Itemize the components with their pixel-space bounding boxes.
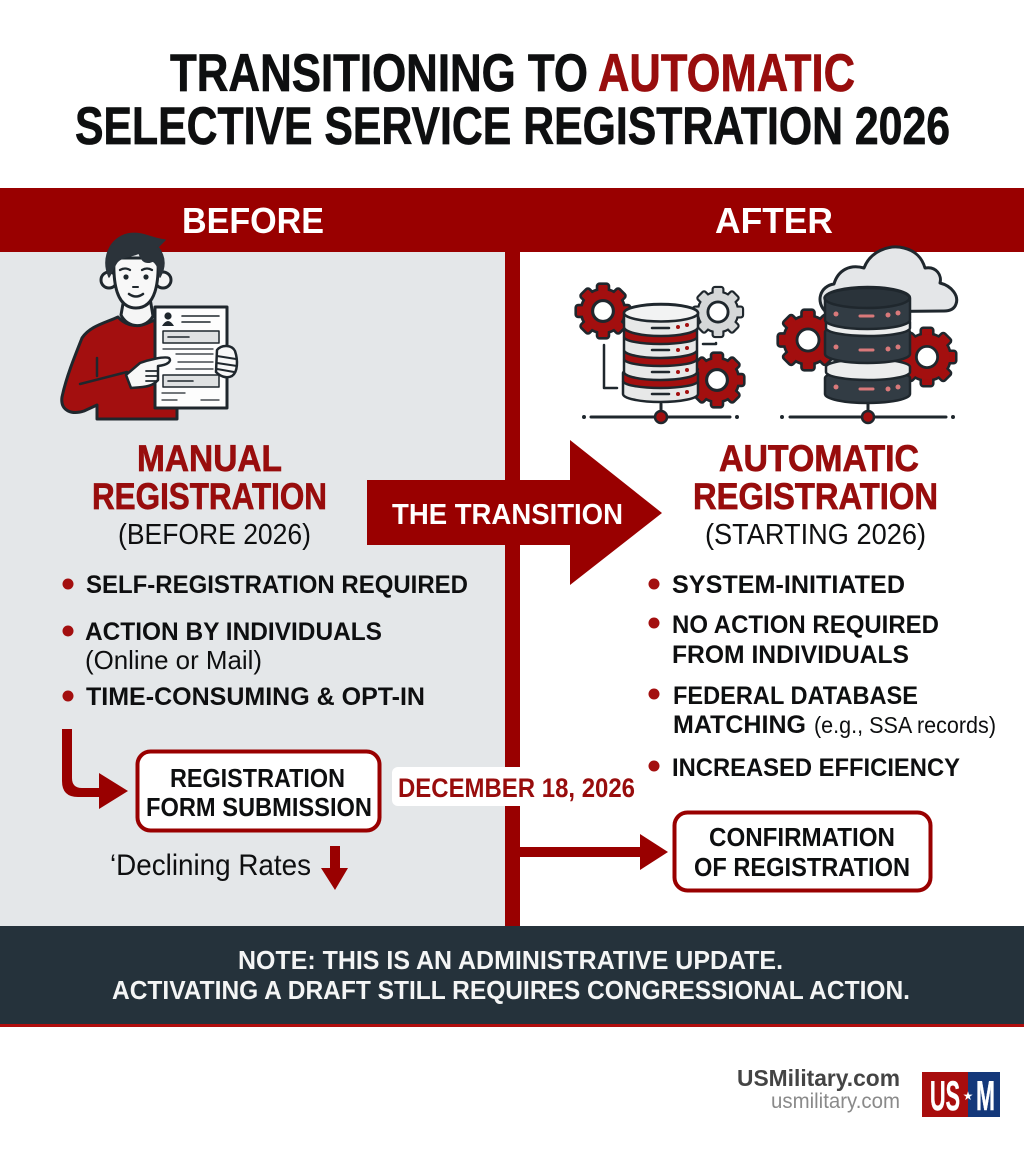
title: TRANSITIONING TO [170,44,588,103]
gear: red left [577,285,629,337]
gear: red right [899,329,955,385]
box: confirmation of registration [674,812,930,890]
note band: NOTE: THIS IS AN ADMINISTRATIVE UPDATE. [238,945,783,975]
logo: M [976,1072,995,1119]
heading: manual registration: REGISTRATION [92,476,327,517]
center divider [505,252,520,926]
footer brand text: usmilitary.com [771,1090,900,1113]
gear: red lower [691,354,743,406]
icon: server stack with gears [577,285,743,423]
footer brand text [737,1065,900,1113]
callout: date: DECEMBER 18, 2026 [398,773,635,803]
logo: US [930,1072,960,1119]
list: after bullets: MATCHING [673,711,806,739]
arrow: the transition [367,440,662,585]
icon: cloud database with gears [779,247,957,423]
box: confirmation of registration: CONFIRMATION [709,822,895,852]
list: after bullets: SYSTEM-INITIATED [672,571,905,599]
heading: automatic registration: (STARTING 2026) [705,519,926,551]
arrow: elbow to form submission [62,729,128,809]
arrow: to confirmation [520,834,668,870]
heading: automatic registration: AUTOMATIC [719,438,919,479]
list: after bullets: (e.g., SSA records) [814,712,996,738]
header band: BEFORE [182,200,324,241]
heading: automatic registration [693,438,938,551]
heading: manual registration [92,438,327,551]
header band [0,188,1024,252]
box: registration form submission [138,752,380,830]
header band: AFTER [715,200,833,241]
list: before bullets: SELF-REGISTRATION REQUIRED [86,571,468,599]
list: before bullets [62,571,468,711]
arrow: declining [321,846,348,890]
panel: before background [0,252,505,926]
gear: red left [779,311,837,369]
callout: date [392,767,640,806]
title [75,44,950,156]
icon: person holding form [62,233,237,419]
list: before bullets: TIME-CONSUMING & OPT-IN [86,683,425,711]
box: confirmation of registration: OF REGISTRATION [694,852,910,882]
list: before bullets: ACTION BY INDIVIDUALS [85,618,382,646]
heading: automatic registration: REGISTRATION [693,476,938,517]
note band: ACTIVATING A DRAFT STILL REQUIRES CONGRESSIONAL ACTION. [112,975,910,1005]
heading: manual registration: (BEFORE 2026) [118,519,311,551]
note band [0,926,1024,1027]
footer brand text: USMilitary.com [737,1065,900,1091]
arrow: the transition: THE TRANSITION [392,499,623,531]
text: declining rates: ‘Declining Rates [110,849,311,882]
list: after bullets: INCREASED EFFICIENCY [672,754,960,782]
title: AUTOMATIC [598,44,855,103]
box: registration form submission: REGISTRATION [170,763,345,793]
list: after bullets: FEDERAL DATABASE [673,682,918,710]
gear: gray [694,288,742,336]
logo: ★ [963,1089,973,1103]
heading: manual registration: MANUAL [137,438,282,479]
list: after bullets: FROM INDIVIDUALS [672,641,909,669]
box: registration form submission: FORM SUBMISSION [146,792,372,822]
list: after bullets: NO ACTION REQUIRED [672,611,939,639]
list: before bullets: (Online or Mail) [85,645,262,675]
list: after bullets [648,571,996,782]
